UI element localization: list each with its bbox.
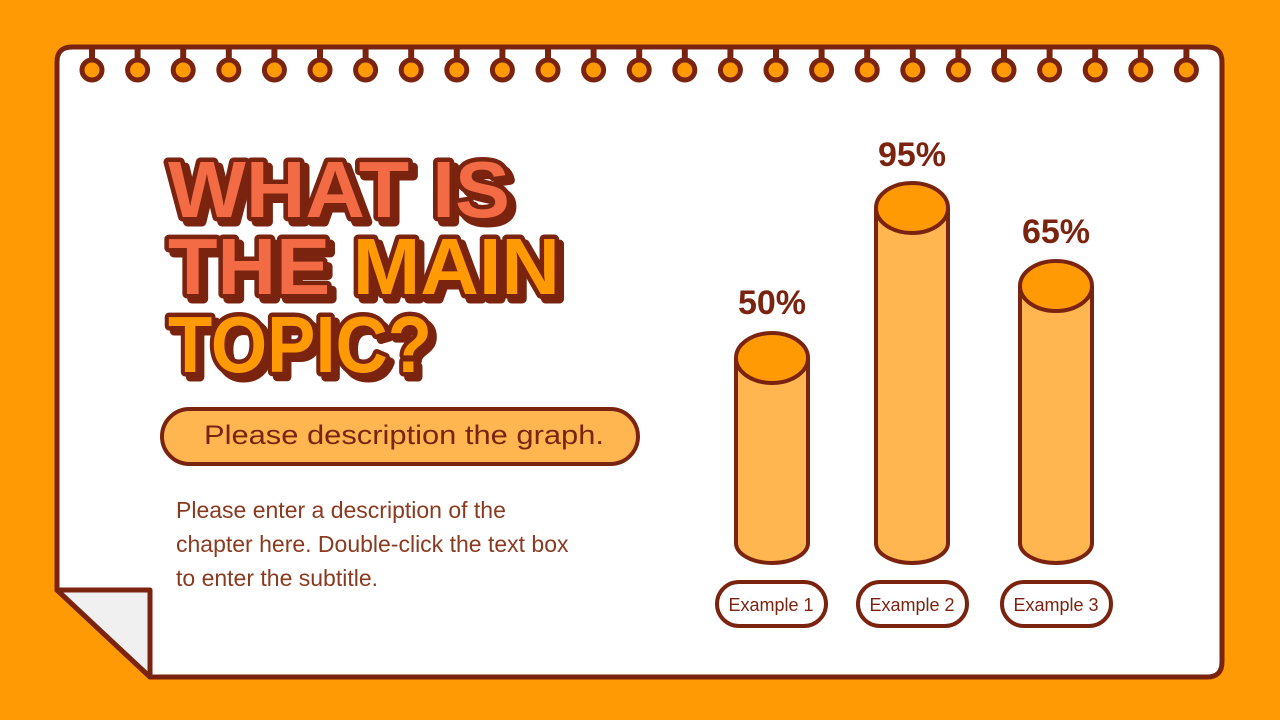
- description text: to enter the subtitle.: [176, 565, 378, 591]
- bar: example 3: [1020, 213, 1092, 563]
- bar chart: [736, 136, 1092, 563]
- panel: notebook card: [57, 47, 1222, 677]
- title: THE MAIN: [168, 222, 560, 311]
- category labels: Example 3: [1013, 595, 1099, 615]
- icon: page curl: [57, 590, 150, 677]
- category labels: [717, 582, 1111, 626]
- bar: example 1: 50%: [738, 284, 806, 322]
- description text: [176, 497, 569, 591]
- bar: example 3: 65%: [1022, 213, 1090, 251]
- bar: example 2: [876, 136, 948, 563]
- bar: example 1: [736, 284, 808, 563]
- category labels: Example 1: [728, 595, 814, 615]
- description text: Please enter a description of the: [176, 497, 506, 523]
- category labels: Example 2: [869, 595, 955, 615]
- binder rings: [82, 49, 1196, 80]
- title: WHAT IS: [168, 145, 510, 234]
- title: [168, 145, 565, 394]
- title: WHAT IS: [173, 150, 515, 239]
- subtitle pill: Please description the graph.: [204, 420, 604, 450]
- title: TOPIC?: [168, 300, 432, 389]
- title: TOPIC?: [173, 305, 437, 394]
- bar: example 2: 95%: [878, 136, 946, 174]
- subtitle pill: [162, 409, 638, 464]
- description text: chapter here. Double-click the text box: [176, 531, 569, 557]
- title: THE MAIN: [173, 227, 565, 316]
